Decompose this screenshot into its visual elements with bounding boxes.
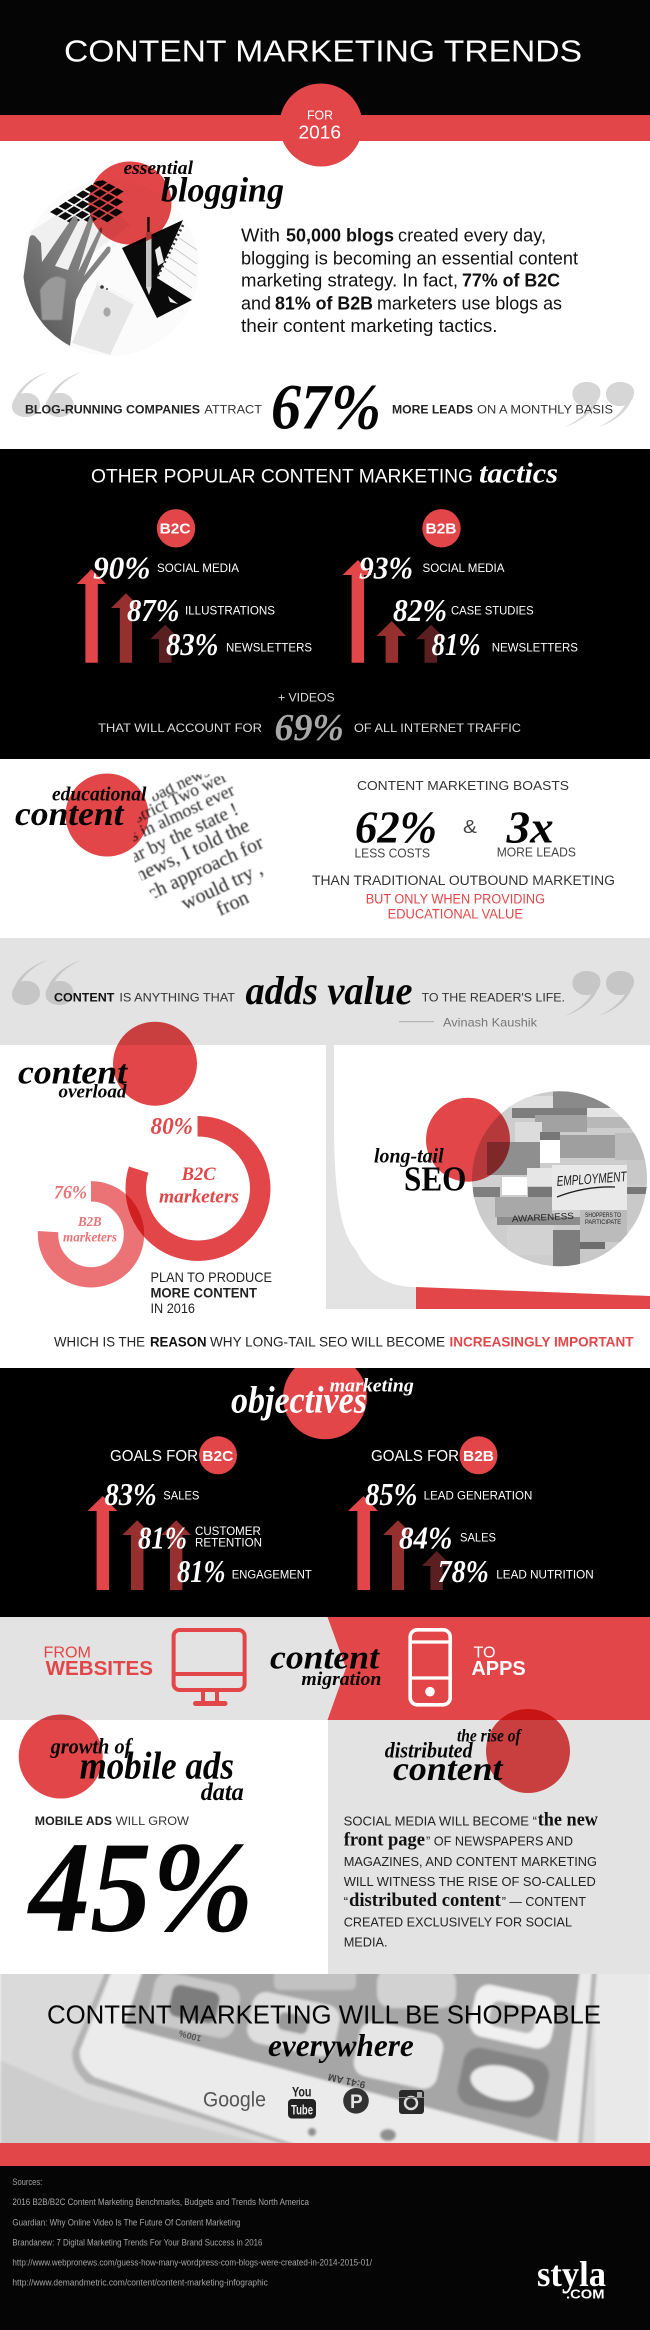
text: distributed content explanation: MAGAZINES, AND CONTENT MARKETING (344, 1854, 597, 1869)
panel: content migration (0, 1617, 650, 1720)
text: blogging statistics: marketers use blogs as (377, 293, 562, 313)
chart: B2C goals arrows: CUSTOMER (195, 1526, 261, 1538)
icon: smartphone (410, 1630, 450, 1705)
chart: B2B goals arrows (348, 1476, 594, 1590)
accent circle (426, 1098, 510, 1182)
text: blogging statistics: 81% of B2B (275, 293, 373, 313)
text: to apps (471, 1645, 526, 1680)
text: plan to produce more content: IN 2016 (150, 1300, 195, 1316)
chart: B2B tactics arrows: SOCIAL MEDIA (422, 563, 505, 575)
icon: Pinterest: P (350, 2092, 363, 2113)
text: distributed content explanation: the new (538, 1810, 598, 1831)
red wedge (416, 1287, 650, 1309)
text: content marketing boasts: MORE LEADS (497, 845, 576, 860)
heading: essential blogging (124, 158, 284, 210)
text: blogging statistics: created every day, (398, 226, 546, 246)
heading: marketing objectives: objectives (231, 1379, 367, 1421)
photo: hand on keyboard with phone and notebook (20, 179, 199, 356)
chart: B2B tactics arrows: 93% (359, 549, 413, 585)
heading: marketing objectives: marketing (330, 1376, 414, 1397)
chart: B2C tactics arrows: SOCIAL MEDIA (157, 563, 239, 575)
text: content marketing boasts: LESS COSTS (354, 845, 430, 860)
heading: the rise of distributed content: distributed (385, 1738, 474, 1763)
chart: B2B tactics arrows: CASE STUDIES (451, 605, 534, 617)
chart: B2B 76% ring: marketers (63, 1231, 118, 1246)
heading: growth of mobile ads data: data (201, 1779, 244, 1806)
heading: other popular tactics (91, 458, 558, 489)
chart: B2B goals arrows: LEAD GENERATION (424, 1490, 532, 1502)
logo: styla.com: styla (537, 2254, 606, 2294)
icon: Google wordmark: Google (203, 2089, 266, 2112)
heading: long-tail SEO: long-tail (374, 1143, 444, 1167)
heading: content migration: content (270, 1639, 381, 1676)
panel: content overload (18, 1022, 272, 1316)
chart: B2B tactics arrows (342, 549, 578, 663)
text: from websites: FROM (44, 1645, 91, 1662)
panel: marketing objectives (0, 1355, 650, 1617)
chart: B2C goals arrows: ENGAGEMENT (232, 1569, 312, 1581)
heading: goals for B2B: GOALS FOR (371, 1448, 459, 1465)
text: videos 69% of traffic: THAT WILL ACCOUNT FOR (98, 721, 262, 735)
text: blogging statistics: With (241, 226, 280, 246)
icon: closing quotation mark (564, 971, 634, 1016)
heading: content overload: overload (58, 1082, 127, 1103)
text: blogging statistics: 77% of B2C (462, 271, 560, 291)
accent circle (19, 1714, 103, 1798)
text: sources: http://www.webpronews.com/guess-how-many-wordpress-com-blogs-were-created-in-2014-2015-01/ (12, 2258, 372, 2269)
text: content marketing boasts (312, 778, 615, 922)
heading: educational content: educational (52, 784, 147, 806)
badge: for 2016: 2016 (298, 123, 341, 143)
text: to apps: APPS (471, 1658, 526, 1680)
photo: wall of sticky notes: SHOPPERS TO (585, 1213, 621, 1219)
text: reason line: REASON (150, 1334, 206, 1350)
header panel (0, 0, 650, 166)
text: sources: Brandanew: 7 Digital Marketing Trends For Your Brand Success in 2016 (12, 2237, 262, 2248)
panel: essential blogging (12, 158, 634, 443)
panel: shoppable everywhere (0, 1968, 650, 2150)
text: distributed content explanation: WILL WITNESS THE RISE OF SO-CALLED (344, 1874, 596, 1889)
text: content marketing boasts: THAN TRADITIONAL OUTBOUND MARKETING (312, 873, 615, 888)
text: distributed content explanation: CREATED EXCLUSIVELY FOR SOCIAL (344, 1914, 572, 1929)
chart: B2B 76% ring: B2B (77, 1215, 102, 1230)
heading: other popular tactics: OTHER POPULAR CONTENT MARKETING (91, 465, 473, 487)
heading: essential blogging: essential (124, 158, 194, 179)
chart: B2B goals arrows: LEAD NUTRITION (496, 1569, 594, 1581)
chart: B2B goals arrows: SALES (460, 1533, 496, 1545)
quote: 67% more leads (12, 371, 634, 443)
icon: opening quotation mark (12, 960, 82, 1005)
panel: content quote (0, 938, 650, 1045)
quote: 67% more leads: BLOG-RUNNING COMPANIES (25, 402, 200, 416)
quote text: IS ANYTHING THAT (119, 990, 236, 1004)
heading: growth of mobile ads data: growth of (50, 1733, 134, 1758)
chart: B2C goals arrows: 81% (177, 1553, 226, 1589)
text: content marketing boasts: 3x (506, 802, 554, 853)
chart: B2C 80% ring: B2C (181, 1164, 216, 1185)
text: blogging statistics: their content marketing tactics. (241, 316, 498, 336)
text: reason line: WHICH IS THE (54, 1334, 145, 1350)
badge: for 2016 (280, 84, 362, 166)
photo: newspaper text: news, I told the (132, 814, 253, 887)
chart: B2B 76% ring (48, 1182, 134, 1277)
logo: styla.com: .COM (566, 2286, 604, 2301)
heading: goals for B2B (371, 1436, 498, 1474)
chart: B2C tactics arrows: ILLUSTRATIONS (185, 605, 275, 617)
text: distributed content explanation: ” OF NEWSPAPERS AND (426, 1834, 573, 1849)
photo: wall of sticky notes: AWARENESS (512, 1211, 574, 1224)
quote text: adds value (246, 968, 412, 1013)
photo: newspaper text (133, 774, 264, 916)
quote text: TO THE READER'S LIFE. (422, 990, 565, 1004)
heading: growth of mobile ads data (50, 1733, 244, 1806)
heading: educational content (15, 784, 147, 833)
chart: B2B goals arrows: 84% (399, 1519, 452, 1555)
text: mobile ads will grow: MOBILE ADS (35, 1814, 112, 1828)
text: distributed content explanation: MEDIA. (344, 1935, 388, 1950)
photo: newspaper text: would try , (178, 858, 266, 915)
photo: newspaper text: ch approach for (144, 831, 267, 905)
panel: growth of mobile ads (19, 1714, 254, 1960)
photo: newspaper text: bad news (147, 761, 212, 806)
text: sources: Guardian: Why Online Video Is The Future Of Content Marketing (12, 2217, 241, 2228)
badge: B2C (157, 509, 195, 548)
chart: B2B goals arrows: 85% (365, 1476, 418, 1512)
chart: B2C goals arrows: 81% (138, 1519, 187, 1555)
chart: B2C 80% ring (136, 1114, 260, 1251)
photo: wall of sticky notes: PARTICIPATE (585, 1220, 621, 1226)
heading: long-tail SEO (374, 1143, 466, 1199)
chart: B2C tactics arrows: NEWSLETTERS (226, 642, 312, 654)
chart: B2C goals arrows: 83% (104, 1476, 157, 1512)
accent circle (113, 1022, 197, 1106)
chart: B2B goals arrows: 78% (438, 1553, 489, 1589)
badge: B2C: B2C (160, 520, 191, 538)
text: reason line: WHY LONG-TAIL SEO WILL BECOME (210, 1334, 445, 1350)
text: videos 69% of traffic: + VIDEOS (278, 690, 335, 704)
chart: B2C tactics arrows (77, 549, 312, 663)
text: distributed content explanation: ” — CONTENT (502, 1894, 586, 1909)
heading: shoppable: CONTENT MARKETING WILL BE SHOPPABLE (47, 2001, 601, 2029)
photo: newspaper text: ar by the state ! (127, 799, 242, 868)
icon: YouTube: Tube (291, 2102, 313, 2118)
badge: B2B (422, 509, 461, 548)
text: from websites: WEBSITES (46, 1658, 153, 1680)
badge: B2B: B2B (426, 520, 457, 538)
heading: the rise of distributed content: the rise of (457, 1726, 522, 1746)
text: distributed content explanation: distributed content (349, 1890, 501, 1911)
text: videos 69% of traffic: OF ALL INTERNET TRAFFIC (354, 721, 521, 735)
chart: B2C tactics arrows: 83% (166, 626, 218, 662)
photo: wall of sticky notes (470, 1090, 650, 1269)
panel: educational content (15, 761, 615, 922)
text: reason line (54, 1334, 634, 1350)
text: content marketing boasts: CONTENT MARKETING BOASTS (357, 778, 569, 793)
accent circle (66, 774, 148, 856)
chart: B2B tactics arrows: 82% (393, 592, 447, 628)
text: blogging statistics: marketing strategy. In fact, (241, 271, 458, 291)
chart: B2C tactics arrows: 90% (93, 549, 150, 585)
panel: distributed content (328, 1709, 650, 1974)
text: blogging statistics: and (241, 293, 271, 313)
accent circle (486, 1709, 570, 1793)
text: sources (12, 2177, 372, 2289)
text: sources: Sources: (12, 2177, 42, 2188)
heading: long-tail SEO: SEO (404, 1160, 466, 1199)
text: blogging statistics: blogging is becoming an essential content (241, 248, 578, 268)
chart: B2C goals arrows (88, 1476, 312, 1590)
heading: the rise of distributed content: content (393, 1751, 504, 1788)
photo: blurred smartphone: 9:41 AM (327, 2071, 367, 2090)
heading: goals for B2C: B2C (202, 1448, 233, 1465)
photo: newspaper text: fron (213, 887, 252, 921)
text: from websites (44, 1645, 153, 1680)
icon: Pinterest (343, 2088, 369, 2114)
text: distributed content explanation: “ (344, 1894, 348, 1909)
quote text: Avinash Kaushik (443, 1016, 538, 1030)
text: plan to produce more content (150, 1269, 272, 1316)
icon: closing quotation mark (564, 382, 634, 427)
text: blogging statistics (241, 226, 578, 336)
panel: footer (0, 2166, 650, 2330)
chart: B2B tactics arrows: 81% (432, 626, 481, 662)
heading: content overload: content (18, 1054, 129, 1091)
badge: for 2016: FOR (307, 108, 333, 122)
text: sources: http://www.demandmetric.com/content/content-marketing-infographic (12, 2278, 268, 2289)
title: CONTENT MARKETING TRENDS (64, 34, 582, 69)
text: mobile ads will grow (35, 1814, 190, 1828)
chart: B2C goals arrows: SALES (163, 1490, 200, 1502)
chart: B2B 76% ring: 76% (54, 1182, 87, 1203)
quote: 67% more leads: ON A MONTHLY BASIS (477, 402, 613, 416)
photo: newspaper text: strict Two wer (130, 766, 230, 827)
heading: content migration (270, 1639, 381, 1690)
chart: B2C goals arrows: RETENTION (195, 1538, 262, 1550)
text: content marketing boasts: BUT ONLY WHEN PROVIDING (366, 891, 545, 906)
text: blogging statistics: 50,000 blogs (286, 226, 394, 246)
text: reason line: INCREASINGLY IMPORTANT (450, 1334, 634, 1350)
quote: 67% more leads: 67% (271, 371, 381, 443)
photo: blurred smartphone: 100% (178, 2028, 203, 2044)
accent circle (88, 162, 172, 244)
quote text: CONTENT (54, 990, 115, 1004)
text: videos 69% of traffic: 69% (274, 707, 344, 749)
photo: blurred smartphone (0, 1968, 650, 2150)
stat: 45%: 45% (26, 1816, 254, 1960)
heading: essential blogging: blogging (161, 171, 284, 210)
text: mobile ads will grow: WILL GROW (116, 1814, 190, 1828)
text: to apps: TO (474, 1645, 496, 1662)
icon: YouTube (288, 2084, 316, 2118)
text: content marketing boasts: 62% (355, 802, 437, 853)
heading: everywhere: everywhere (268, 2027, 414, 2063)
heading: goals for B2C: GOALS FOR (110, 1448, 198, 1465)
icon: opening quotation mark (12, 372, 82, 417)
photo: newspaper text: s in almost ever (126, 780, 238, 846)
quote text (54, 968, 565, 1030)
quote: 67% more leads: MORE LEADS (392, 402, 473, 416)
heading: goals for B2C (110, 1436, 237, 1474)
chart: B2B tactics arrows: NEWSLETTERS (492, 642, 578, 654)
heading: growth of mobile ads data: mobile ads (80, 1745, 234, 1788)
decorative curved frame (326, 1045, 416, 1309)
text: content marketing boasts: EDUCATIONAL VALUE (388, 907, 523, 922)
icon: YouTube: You (292, 2084, 312, 2100)
accent circle (283, 1368, 367, 1440)
panel: long-tail SEO (326, 1045, 650, 1309)
heading: content migration: migration (301, 1669, 381, 1690)
heading: the rise of distributed content (385, 1726, 522, 1788)
text: content marketing boasts: & (463, 817, 477, 837)
icon: desktop monitor (174, 1630, 245, 1704)
heading: other popular tactics: tactics (479, 458, 558, 489)
chart: B2C 80% ring: marketers (159, 1187, 239, 1208)
text: distributed content explanation: SOCIAL MEDIA WILL BECOME “ (344, 1814, 537, 1829)
text: videos 69% of traffic (98, 690, 521, 749)
heading: goals for B2B: B2B (463, 1448, 494, 1465)
text: sources: 2016 B2B/B2C Content Marketing Benchmarks, Budgets and Trends North America (12, 2197, 310, 2208)
quote: 67% more leads: ATTRACT (204, 402, 263, 416)
text: distributed content explanation (344, 1810, 598, 1950)
heading: educational content: content (15, 796, 125, 833)
text: plan to produce more content: PLAN TO PRODUCE (150, 1269, 272, 1285)
chart: B2C tactics arrows: 87% (127, 592, 180, 628)
text: distributed content explanation: front page (344, 1830, 425, 1851)
icon: Instagram (399, 2090, 424, 2114)
red footer band (0, 2143, 650, 2166)
chart: B2C 80% ring: 80% (150, 1114, 193, 1140)
text: plan to produce more content: MORE CONTENT (150, 1284, 257, 1300)
panel: popular tactics (0, 449, 650, 759)
